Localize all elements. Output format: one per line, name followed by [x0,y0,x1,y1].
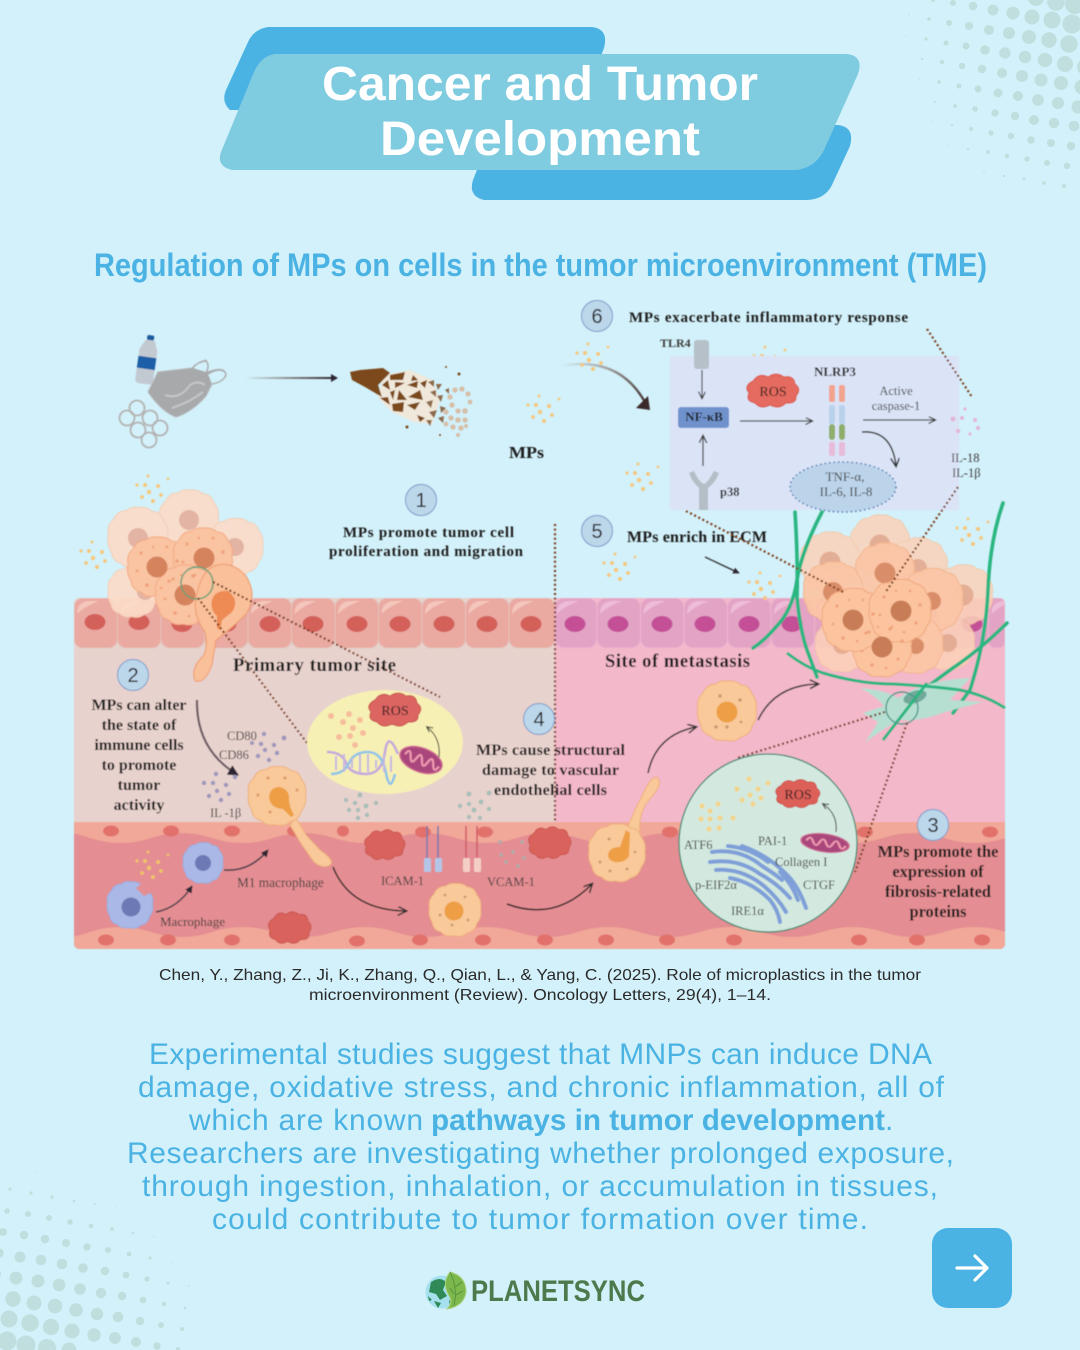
adhesion molecules: ICAM-1: ICAM-1 [381,874,424,888]
epithelial cells: metastasis site [555,598,1005,648]
NLRP3 inflammasome: NLRP3 [814,364,856,379]
label: IL-18, IL-1β: IL-1β [952,466,981,480]
endoplasmic reticulum [710,846,806,922]
icon: face mask [148,360,226,417]
callout 6: 6 [591,306,603,328]
cytokine ellipse: TNF-α, [826,469,864,484]
ROS cloud in inset [776,780,820,808]
callout 3: expression of [892,862,984,881]
macrophage [107,881,225,929]
adhesion molecules: ICAM-1 [381,826,442,888]
banner front shape [220,54,860,170]
panel: tissue background [69,598,1005,949]
callout 4: damage to vascular [482,762,619,779]
callout 2: the state of [102,717,177,734]
title banner [220,27,860,200]
icon: bottle [135,334,159,385]
icon: six-pack rings [120,400,168,448]
icon: globe [426,1276,458,1308]
callout 1 [329,484,524,560]
callout 4 [476,704,626,799]
icon: DNA [327,741,398,784]
body text: damage, oxidative stress, and chronic inflammation, all of [138,1071,945,1104]
arrow: mitochondrion to ROS [427,727,439,757]
arrow: macrophage to M1 [156,886,192,912]
label: primary tumor site: Primary tumor site [233,656,396,676]
labels: immune markers [210,729,257,820]
arrow: NF-kB to NLRP3 [740,420,812,422]
callout 2: 2 [127,665,139,687]
body text: through ingestion, inhalation, or accumulation in tissues, [142,1170,938,1203]
callout 5: MPs enrich in ECM [627,529,767,546]
callout 2: to promote [102,757,176,774]
title text [322,58,758,166]
banner back shape bottom [472,125,851,200]
callout 2: tumor [118,777,160,794]
callout 4: 4 [533,709,545,731]
diagram: regulation of MPs in the TME [69,300,1007,949]
body text: . [885,1104,893,1137]
icon: leaf [445,1272,466,1309]
vessel lining bottom [69,927,1005,949]
arrow: to fibroblast [758,684,818,720]
next arrow button [932,1228,1012,1308]
callout 5 [582,516,767,546]
body text [127,1038,954,1236]
callout 3: MPs promote the [878,842,998,861]
adhesion molecules: VCAM-1 [463,826,535,889]
NF-kB box: NF-κB [685,409,723,424]
inset labels: ATF6 [684,838,712,852]
subtitle heading: Regulation of MPs on cells in the tumor microenvironment (TME) [94,247,987,283]
arrow: TLR4 to NF-kB [701,370,703,398]
inset labels: IRE1α [731,904,764,918]
particles in fibrosis inset [698,776,771,832]
circulating tumor cell [429,883,481,936]
callout 5: 5 [591,521,603,543]
labels: immune markers: CD80 [227,729,257,743]
callout 1: MPs promote tumor cell [343,525,514,541]
M1 macrophage [183,842,324,890]
callout 4: endothelial cells [494,782,607,799]
callout 2: activity [114,797,164,814]
logo: PlanetSync [426,1272,645,1309]
arrow: plastics to fragments [245,374,338,382]
mitochondrion in inset [800,831,850,855]
tumor cluster: metastasis site [800,515,992,677]
particles: IL-18 and IL-1β [950,407,980,436]
icon: plastic waste [120,334,226,448]
inset labels: PAI-1 [758,834,787,848]
p38 receptor [689,471,739,510]
NF-kB box [678,407,729,428]
label: active caspase-1 [872,384,920,413]
inset: DNA damage and ROS [307,690,463,794]
inset labels: Collagen I [775,855,827,869]
label: MPs: MPs [509,443,545,462]
body text: pathways in tumor development [431,1104,885,1137]
particles: microplastics [79,342,989,600]
M1 macrophage: M1 macrophage [237,875,324,890]
fibroblast [787,653,1005,743]
callout 6 [582,300,908,332]
callout 3: proteins [909,902,967,921]
ROS cloud [747,374,799,407]
dotted zoom lines [198,329,972,872]
inset: DNA damage and ROS: ROS [381,704,409,719]
inset: fibrosis pathway [679,754,857,932]
callout 3: 3 [927,815,939,837]
blood vessel [69,822,1005,949]
wordmark: PLANETSYNC [471,1275,645,1308]
adhesion molecules: VCAM-1: VCAM-1 [487,875,535,889]
arrow: to metastasis cell [648,727,696,773]
label: IL-18, IL-1β [951,451,981,480]
citation: microenvironment (Review). Oncology Letters, 29(4), 1–14. [309,987,771,1004]
extravasating tumor cell [248,766,332,867]
TLR4 receptor [660,336,709,369]
labels: immune markers: CD86 [219,748,249,762]
macrophage: Macrophage [160,914,225,929]
callout 3 [878,810,998,921]
callout 1: proliferation and migration [329,544,524,560]
label: active caspase-1: Active [879,384,913,398]
callout 2: immune cells [94,737,184,754]
TLR4 receptor: TLR4 [660,336,691,350]
arrow: to immune cell [197,700,238,775]
callout 6: MPs exacerbate inflammatory response [629,310,908,326]
callout 1: 1 [415,490,427,512]
citation [159,967,922,1004]
arrow: p38 to NF-kB [702,436,704,466]
body text: Experimental studies suggest that MNPs can induce DNA [149,1038,932,1071]
panel: inflammatory pathway [660,336,959,512]
arrow: mitochondrion to ROS, inset [823,804,836,832]
icon: fragmenting bottle [350,366,472,437]
inset: fibrosis pathway: ROS [784,788,812,803]
ROS cloud: ROS [759,385,787,400]
particles in inset [328,711,366,748]
arrow: curved to inflammatory panel [560,364,650,410]
particles: in vessel [135,850,169,879]
banner back shape top [224,27,605,110]
NLRP3 inflammasome [814,364,856,456]
inset labels: CTGF [803,878,835,892]
epithelial cells: primary site [74,598,555,648]
particles: vessel grey [498,840,526,868]
inset labels [684,834,835,918]
body text: Researchers are investigating whether prolonged exposure, [127,1137,954,1170]
labels: immune markers: IL -1β [210,806,241,820]
arrow: into ECM [705,557,739,573]
cytokine ellipse [790,462,896,512]
label: site of metastasis: Site of metastasis [605,652,750,672]
callout 4: MPs cause structural [476,742,626,759]
body text: could contribute to tumor formation over time. [212,1203,868,1236]
clots: red cells [268,827,571,943]
p38 receptor: p38 [720,485,739,499]
title text: Cancer and Tumor [322,58,758,111]
inset labels: p-EIF2α [695,878,737,892]
label: IL-18, IL-1β: IL-18 [951,451,979,465]
fibers: extracellular matrix [753,503,1007,713]
title text: Development [380,113,700,166]
vessel lining top [69,822,1005,843]
arrow: M1 to vessel [224,850,268,870]
particles: grey [344,791,491,820]
callout 3: fibrosis-related [885,882,991,901]
callout 2 [91,660,187,814]
label: active caspase-1: caspase-1 [872,399,920,413]
body text: which are known [188,1104,423,1137]
icon: mitochondrion [396,741,446,779]
cytokine ellipse: IL-6, IL-8 [820,484,872,499]
metastatic tumor cell [697,681,756,741]
zoom ring [181,567,213,599]
tumor cluster: primary site [108,490,263,681]
particles: immune [202,732,286,802]
extravasating cell: metastasis side [589,778,659,882]
arrow: NLRP3 to cytokines [862,432,896,466]
arrow: into vessel [333,867,406,911]
arrow: caspase-1 [863,419,935,421]
migrating tumor cell [194,564,252,681]
arrow: out of vessel [507,884,592,910]
callout 2: MPs can alter [91,697,187,714]
citation: Chen, Y., Zhang, Z., Ji, K., Zhang, Q., Qian, L., & Yang, C. (2025). Role of microplastics in the tumor [159,967,922,984]
